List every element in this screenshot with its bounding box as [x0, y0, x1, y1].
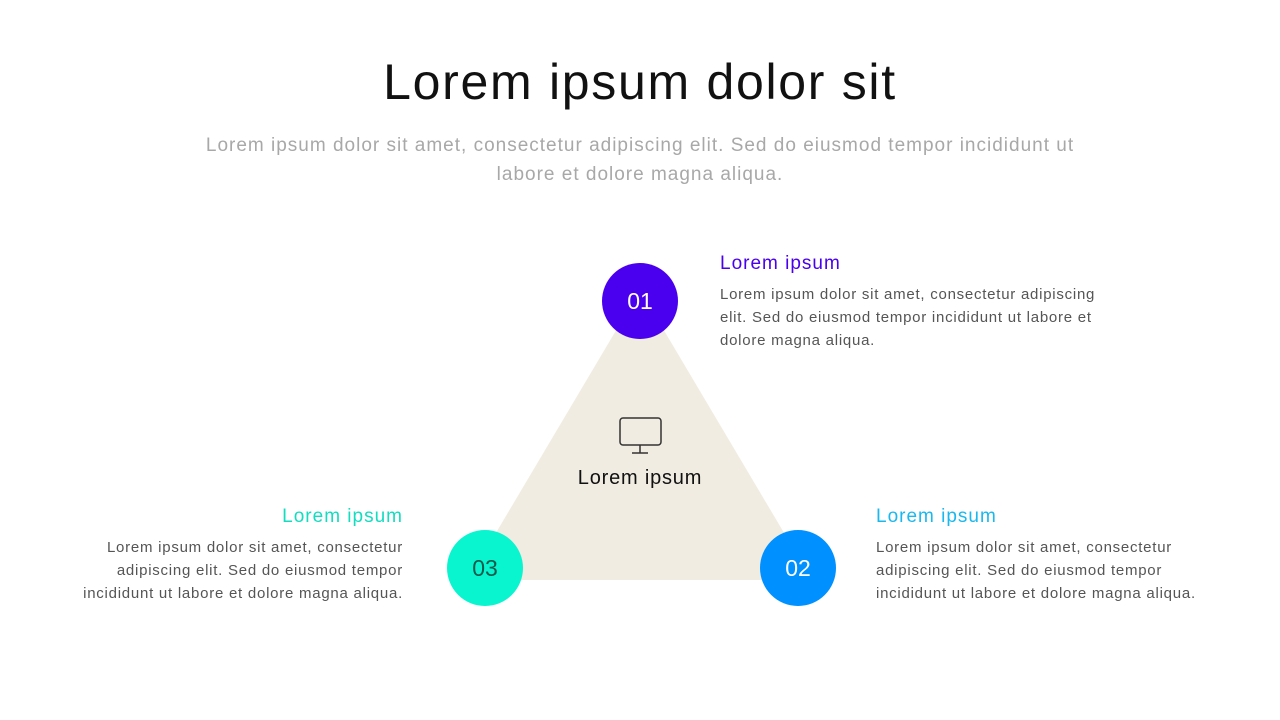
icon: monitor	[620, 418, 661, 453]
subtitle: Lorem ipsum dolor sit amet, consectetur adipiscing elit. Sed do eiusmod tempor incididunt ut	[206, 135, 1074, 156]
subtitle: labore et dolore magna aliqua.	[497, 164, 783, 185]
text block 01: Lorem ipsum	[720, 253, 841, 274]
circle 03	[447, 530, 523, 606]
text block 03	[83, 506, 403, 602]
circle 01: 01	[627, 288, 653, 314]
title: Lorem ipsum dolor sit	[383, 54, 897, 110]
text block 01	[720, 253, 1095, 349]
text block 02: Lorem ipsum dolor sit amet, consectetur	[876, 539, 1172, 556]
text block 02: adipiscing elit. Sed do eiusmod tempor	[876, 562, 1162, 579]
circle 02	[760, 530, 836, 606]
text block 01: Lorem ipsum dolor sit amet, consectetur adipiscing	[720, 286, 1095, 303]
circle 02: 02	[785, 555, 811, 581]
text block 02	[876, 506, 1196, 602]
text block 02: Lorem ipsum	[876, 506, 997, 527]
text block 01: elit. Sed do eiusmod tempor incididunt ut labore et	[720, 309, 1092, 326]
text block 02: incididunt ut labore et dolore magna aliqua.	[876, 585, 1196, 602]
circle 01	[602, 263, 678, 339]
text block 03: Lorem ipsum	[282, 506, 403, 527]
triangle	[468, 290, 812, 580]
text block 03: Lorem ipsum dolor sit amet, consectetur	[107, 539, 403, 556]
text block 01: dolore magna aliqua.	[720, 332, 875, 349]
subtitle	[206, 135, 1074, 185]
text block 03: adipiscing elit. Sed do eiusmod tempor	[117, 562, 403, 579]
text block 03: incididunt ut labore et dolore magna aliqua.	[83, 585, 403, 602]
center label: Lorem ipsum	[578, 467, 702, 489]
circle 03: 03	[472, 555, 498, 581]
